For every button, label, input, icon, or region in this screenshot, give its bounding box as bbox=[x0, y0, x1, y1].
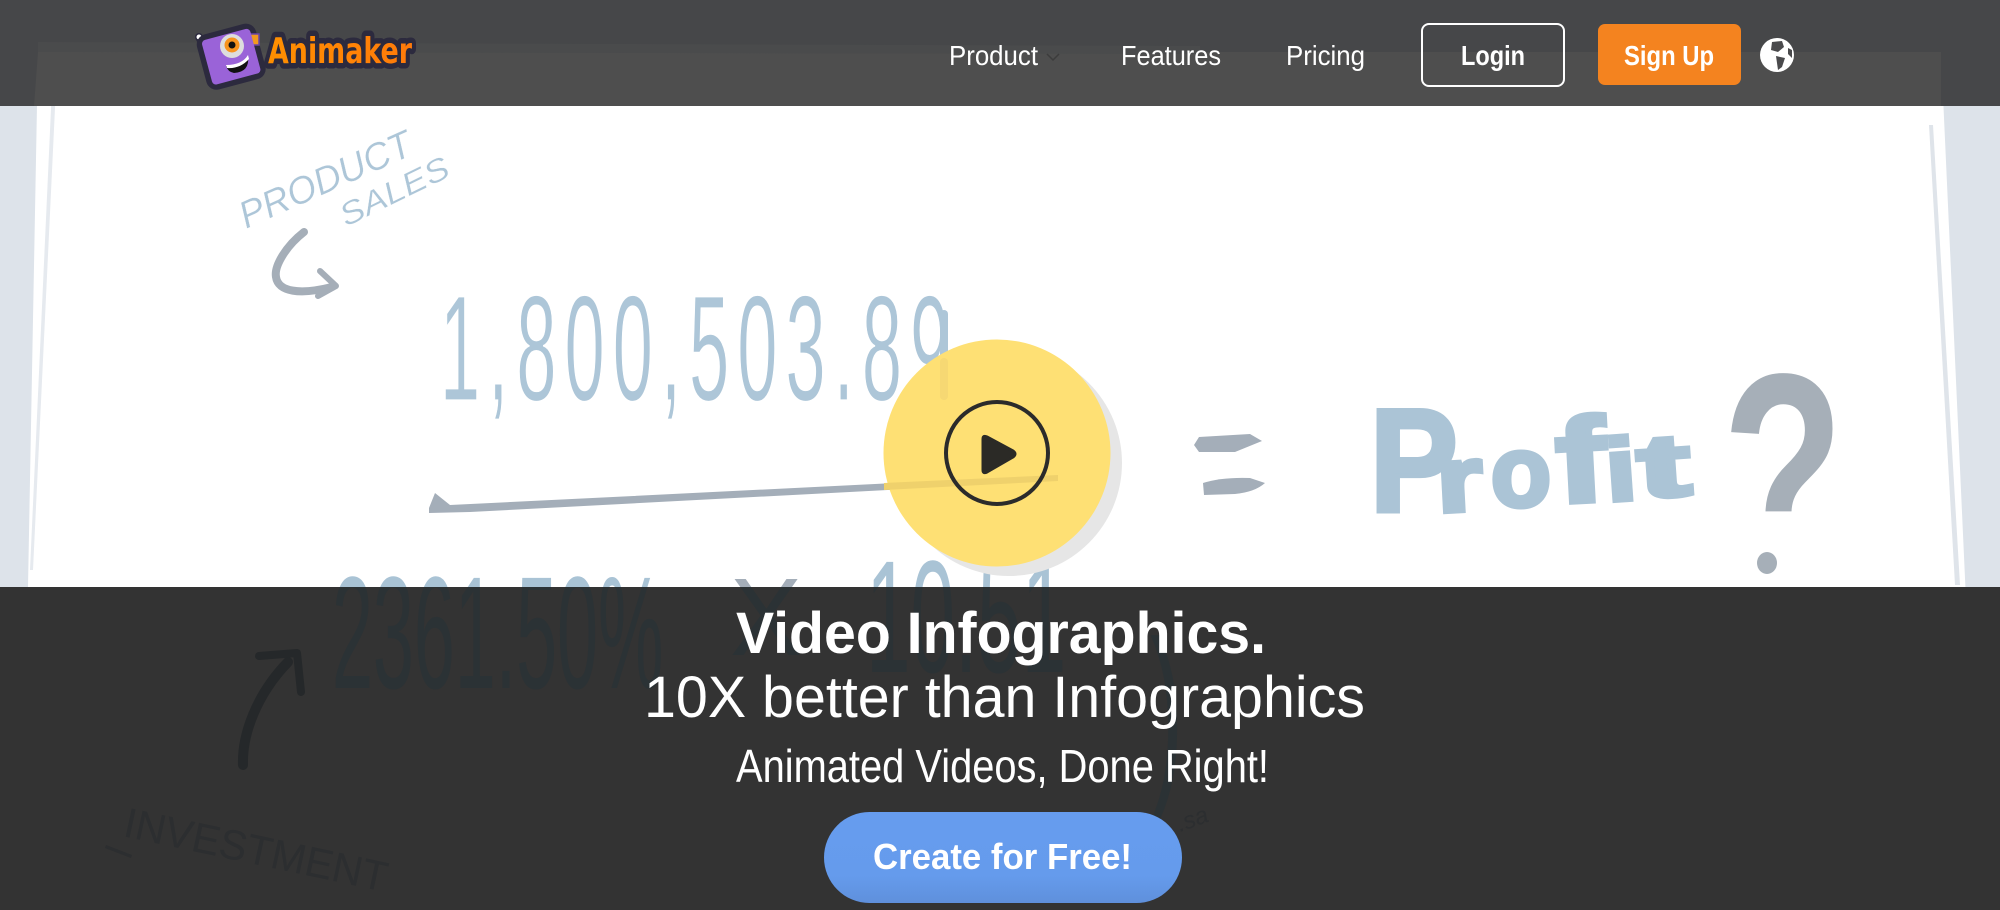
faint dark arrow bbox=[243, 653, 301, 765]
word: Profit: f bbox=[1552, 392, 1611, 529]
faint label fragment: .sa bbox=[1173, 801, 1212, 838]
faint dark figures behind the band: 2361.50% bbox=[332, 544, 663, 723]
faint dark figures behind the band bbox=[332, 527, 1183, 823]
nav item: Product: Product bbox=[949, 40, 1038, 71]
numerator figure: 1,800,503.89 bbox=[440, 264, 958, 432]
login button bbox=[1422, 24, 1564, 86]
nav item: Features: Features bbox=[1121, 40, 1221, 71]
word: Profit: i bbox=[1602, 419, 1639, 520]
fraction line bbox=[429, 475, 1058, 513]
logo: Animaker bbox=[196, 28, 412, 85]
denominator figures above the overlay edge: X bbox=[730, 556, 802, 679]
faint dark figures behind the band: 10.51 bbox=[866, 527, 1066, 706]
denominator figures above the overlay edge bbox=[332, 527, 1066, 723]
navigation menu bbox=[949, 40, 1365, 71]
sign up button bbox=[1598, 24, 1741, 85]
dark hero band bbox=[0, 587, 2000, 910]
word: Profit bbox=[1370, 380, 1693, 543]
handwritten label: product sales: SALES bbox=[333, 149, 455, 233]
word: Profit: P bbox=[1370, 380, 1458, 543]
icon: purple robot bbox=[196, 28, 261, 85]
play button bbox=[884, 340, 1122, 576]
logo wordmark: Animaker bbox=[268, 31, 412, 72]
header bar bbox=[0, 0, 2000, 106]
call to action button bbox=[824, 812, 1182, 903]
sign up button: Sign Up bbox=[1624, 40, 1714, 71]
denominator figures above the overlay edge: 10.51 bbox=[866, 527, 1066, 706]
word: Profit: r bbox=[1434, 428, 1485, 532]
faint dark figures behind the band: ) bbox=[1150, 599, 1183, 823]
faint dark figures behind the band: X bbox=[730, 556, 802, 679]
curved arrow to the sales figure bbox=[276, 232, 336, 296]
login button: Login bbox=[1461, 40, 1525, 71]
hero tagline: Animated Videos, Done Right! bbox=[736, 740, 1269, 792]
equals sign bbox=[1194, 434, 1265, 495]
word: Profit: o bbox=[1491, 416, 1551, 528]
handwritten label: product sales: PRODUCT bbox=[233, 122, 421, 237]
call to action button: Create for Free! bbox=[873, 836, 1132, 877]
dropdown chevron bbox=[1047, 54, 1059, 60]
icon: globe bbox=[1760, 38, 1794, 72]
nav item: Pricing: Pricing bbox=[1286, 40, 1365, 71]
hero subheading: 10X better than Infographics bbox=[644, 665, 1365, 730]
denominator figures above the overlay edge: 2361.50% bbox=[332, 544, 663, 723]
faint label: investment: INVESTMENT bbox=[120, 799, 392, 901]
question mark: ? bbox=[1722, 315, 1844, 630]
hero heading: Video Infographics. bbox=[736, 601, 1266, 666]
word: Profit: t bbox=[1634, 415, 1693, 517]
